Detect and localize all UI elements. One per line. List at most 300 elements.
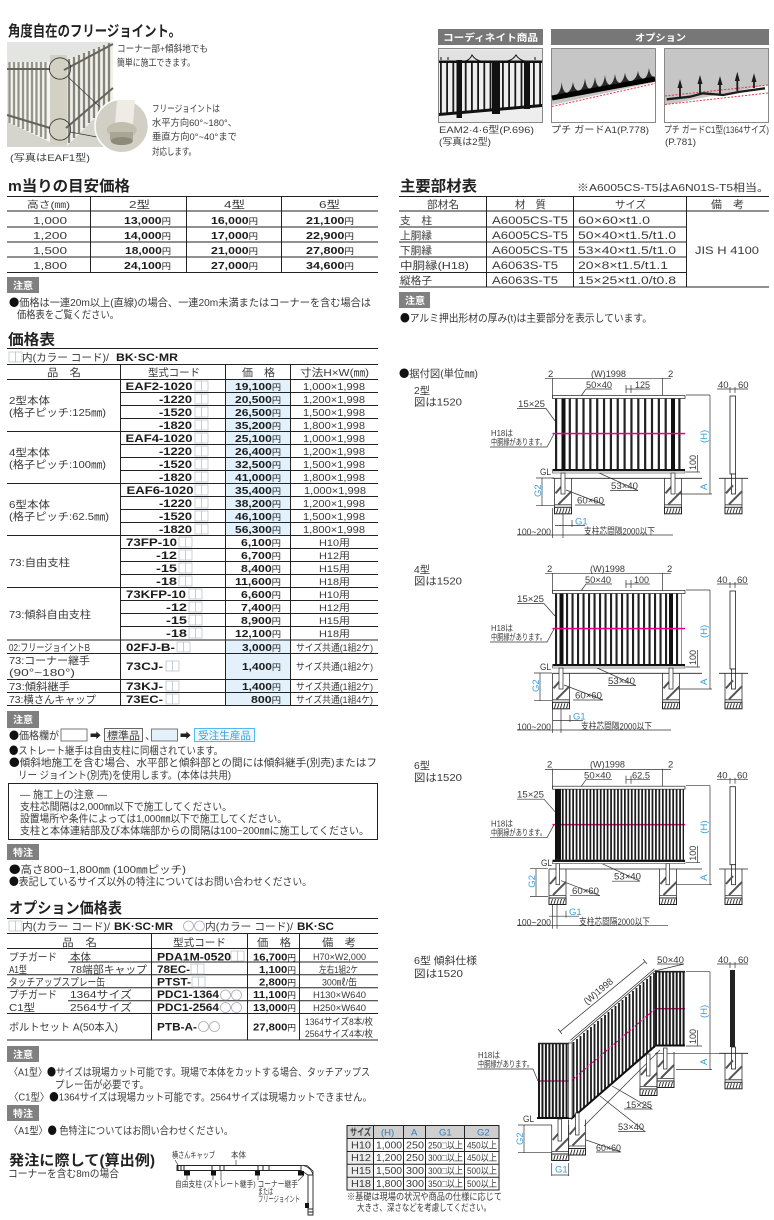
photo: petit guard A1 <box>552 48 656 122</box>
dimensions: サイズ共通(1組2ケ) <box>296 642 373 654</box>
sloped panel <box>574 973 654 1117</box>
legend: price cell colours: 標準品 <box>107 729 140 742</box>
section: option price table <box>7 899 378 1138</box>
table: materials: 支 柱 <box>400 214 433 227</box>
table: materials: 中胴縁(H18) <box>400 259 469 272</box>
photo: gate <box>438 48 542 122</box>
model codes: 73FP-10 <box>126 537 177 549</box>
table: options: 300㎖/缶 <box>322 976 357 988</box>
table: foundation sizes: ※基礎は現場の状況や商品の仕様に応じて <box>347 1191 502 1203</box>
header: coordinated products: コーディネイト商品 <box>443 32 538 44</box>
diagram: type 6: (W)1998 <box>590 760 625 771</box>
table: options: C1型 <box>9 1001 35 1014</box>
table: foundation sizes: 450以上 <box>467 1140 497 1152</box>
notes: special order <box>9 862 312 889</box>
diagram: type 6 sloped <box>414 954 749 1176</box>
table: foundation sizes: 350□以上 <box>428 1179 463 1190</box>
section: ordering example <box>8 1150 313 1215</box>
table: foundation sizes: 1,000 <box>376 1140 402 1152</box>
table: options: 27,800 円 <box>253 1022 296 1034</box>
diagram: type 2: 2 <box>548 369 553 380</box>
diagram: type 6 sloped: A <box>699 1058 710 1065</box>
table: materials: JIS H 4100 <box>695 245 759 257</box>
diagram: layout plan: 自由支柱 (ストレート継手) コーナー継手 <box>175 1179 298 1189</box>
diagram: type 4: 2 <box>667 564 672 575</box>
product names: 73:傾斜自由支柱 <box>9 608 92 621</box>
side view: 60 <box>738 380 749 391</box>
prices: 35,200 円 <box>235 420 281 432</box>
dimensions: サイズ共通(1組4ケ) <box>296 694 373 706</box>
model codes: -15 <box>166 615 187 627</box>
text: joint angles: 水平方向60°~180°、 <box>152 117 237 129</box>
diagram: type 6: 15×25 <box>517 790 544 801</box>
table: foundation sizes: A <box>411 1128 418 1138</box>
table: price per metre: 34,600 円 <box>306 260 354 272</box>
diagram: type 6: 2 <box>547 760 552 771</box>
model codes: -1520 <box>159 511 192 523</box>
table: price per metre: 1,800 <box>33 260 67 272</box>
note: colour special order: 〈A1型〉● 色特注についてはお問い合わせください。 <box>9 1123 233 1138</box>
model codes: -1520 <box>159 407 192 419</box>
dimensions: 1,800×1,998 <box>303 524 365 536</box>
table: price per metre: 1,000 <box>33 215 67 227</box>
side view <box>717 575 748 709</box>
table: options: 11,100 円 <box>253 989 296 1001</box>
table: materials: 15×25×t1.0/t0.8 <box>578 275 676 287</box>
table: price per metre: 16,000 円 <box>211 215 258 227</box>
label: special order <box>7 844 39 860</box>
note: price conditions: ●価格は一連20m以上(直線)の場合、一連20m未満またはコーナーを含む場合は <box>9 295 371 310</box>
dimensions: H18用 <box>319 577 350 588</box>
side view <box>717 955 749 1089</box>
model codes: -1520 <box>159 459 192 471</box>
table header: 型式コード <box>148 366 200 379</box>
table: options: 2564サイズ <box>70 1001 132 1014</box>
heading: price per metre: m当りの目安価格 <box>8 177 130 195</box>
table: price per metre: 2型 <box>129 198 150 211</box>
header: options <box>551 29 769 45</box>
diagram: type 6 sloped: H18は <box>478 1050 500 1060</box>
diagram: type 6 sloped: 60×60 <box>596 1143 621 1154</box>
product names: 73:傾斜継手 <box>9 680 70 693</box>
diagram: type 2: (H) <box>699 430 710 443</box>
diagram: type 2: G1 <box>575 516 588 528</box>
table: materials: A6063S-T5 <box>492 275 558 287</box>
diagram: type 6 sloped: 50×40 <box>657 955 684 966</box>
prices: 25,100 円 <box>235 433 281 445</box>
notes: cutting: 〈A1型〉●サイズは現場カット可能です。現場で本体をカットする場合、タッチアップス <box>9 1064 370 1080</box>
heading: price table: 価格表 <box>8 330 55 348</box>
dimensions: H12用 <box>319 603 350 614</box>
table: foundation sizes: (H) <box>381 1128 394 1138</box>
table: options: 価 格 <box>257 936 292 949</box>
table: foundation sizes: G2 <box>477 1128 490 1138</box>
dimensions: 1,800×1,998 <box>303 472 365 484</box>
table: materials: 縦格子 <box>400 274 433 287</box>
diagram: type 6 sloped: 図は1520 <box>414 968 463 980</box>
diagram: type 4: H18は <box>491 623 513 633</box>
table: foundation sizes: 250 <box>406 1152 424 1164</box>
diagram: type 2: 125 <box>635 380 650 391</box>
diagram: type 6 sloped: G1 <box>555 1164 568 1176</box>
captions: プチ ガードA1(P.778) <box>551 125 649 136</box>
table: foundation sizes: 1,500 <box>376 1165 402 1177</box>
diagram: type 4: 53×40 <box>608 676 635 687</box>
model codes: EAF4-1020 <box>126 433 192 445</box>
model codes: EAF6-1020 <box>126 485 194 497</box>
diagram: type 4: 50×40 <box>585 575 611 586</box>
heading: option prices: オプション価格表 <box>9 899 122 917</box>
side view: 60 <box>737 575 748 586</box>
diagram: type 4: A <box>699 678 710 685</box>
text: joint angles <box>152 104 237 158</box>
section: price table notes <box>7 711 378 889</box>
panel: coordinated products and options <box>438 29 769 148</box>
table: materials: 20×8×t1.5/t1.1 <box>578 260 668 272</box>
table: price per metre: 27,800 円 <box>306 245 354 257</box>
table: main prices <box>7 348 378 706</box>
notes: joints: ●傾斜地施工を含む場合、水平部と傾斜部との間には傾斜継手(別売)またはフ <box>9 755 377 770</box>
colour code note <box>9 920 334 933</box>
captions <box>439 124 769 148</box>
model codes <box>126 381 194 706</box>
diagram: type 2: H18は <box>491 428 513 438</box>
notes: special order: ●高さ800~1,800㎜ (100㎜ピッチ) <box>9 862 186 877</box>
diagram: type 6 sloped: 中胴縁があります。 <box>478 1059 533 1069</box>
diagram: type 4: 15×25 <box>517 594 544 605</box>
notes: cutting: プレー缶が必要です。 <box>55 1078 149 1091</box>
diagram: type 6: A <box>699 874 710 881</box>
diagram: type 6: G1 <box>569 907 582 918</box>
table: options <box>7 918 378 1040</box>
table: price per metre: 17,000 円 <box>211 230 258 242</box>
text: joint angles: フリージョイントは <box>152 104 220 115</box>
table: foundation sizes: 250□以上 <box>428 1140 463 1152</box>
dimensions: H18用 <box>319 629 350 640</box>
table: foundation sizes: 500以上 <box>467 1166 497 1177</box>
prices: 46,100 円 <box>235 511 281 523</box>
dimensions <box>296 381 373 706</box>
table: materials: 部材名 <box>427 198 459 211</box>
prices: 3,000 円 <box>242 642 281 654</box>
diagram: type 4: G1 <box>573 712 586 722</box>
notes: joints: ●ストレート継手は自由支柱に同梱されています。 <box>9 743 223 758</box>
table: materials: 50×40×t1.5/t1.0 <box>578 230 676 242</box>
prices: 6,100 円 <box>241 537 281 549</box>
table: options: H250×W640 <box>313 1003 366 1014</box>
table: price per metre: 6型 <box>319 198 340 211</box>
dimensions: 1,200×1,998 <box>303 394 365 406</box>
legend: price cell colours: 受注生産品 <box>198 729 251 742</box>
product names <box>9 394 109 706</box>
legend: price cell colours: 、 <box>145 730 156 742</box>
label: special order: 特注 <box>13 1108 34 1120</box>
prices: 56,300 円 <box>235 524 281 536</box>
table: foundation sizes: H12 <box>351 1152 371 1164</box>
diagram: type 6: 2 <box>668 760 673 771</box>
table: foundation sizes: 300□以上 <box>428 1166 463 1177</box>
table: price per metre: 14,000 円 <box>124 230 171 242</box>
note: extrusion thickness: ●アルミ押出形材の厚み(t)は主要部分を表示しています。 <box>400 310 652 326</box>
table: foundation sizes: H10 <box>351 1140 371 1152</box>
label: special order: 特注 <box>13 847 34 859</box>
model codes: 73KJ- <box>126 681 163 693</box>
heading: installation drawings: ●据付図(単位㎜) <box>399 366 478 381</box>
notes: cutting <box>9 1064 372 1104</box>
table: colour code note: BK·SC·MR <box>116 352 178 364</box>
model codes: -12 <box>156 550 177 562</box>
table: materials: サイズ <box>615 198 646 211</box>
prices: 35,400 円 <box>235 485 281 497</box>
model codes: -15 <box>156 563 177 575</box>
diagram: type 6: 53×40 <box>614 872 641 883</box>
diagram: type 4: 4型 <box>414 563 430 576</box>
side view: 40 <box>718 955 729 966</box>
prices: 19,100 円 <box>235 381 281 393</box>
table header: 品 名 <box>47 366 81 379</box>
callout: installation cautions <box>8 784 378 840</box>
table: price per metre: 1,200 <box>33 230 67 242</box>
table: options: 16,700 円 <box>253 952 296 964</box>
section: price per metre <box>7 177 378 321</box>
table: foundation sizes: 大きさ、深さなどを考慮してください。 <box>357 1202 491 1214</box>
notes: joints: リー ジョイント(別売)を使用します。(本体は共用) <box>18 768 231 782</box>
diagram: type 2: 支柱芯間隔2000以下 <box>584 526 655 538</box>
diagram: type 4: (H) <box>699 625 710 638</box>
diagram: type 4: 100~200 <box>517 722 551 733</box>
diagram: type 6 sloped: G2 <box>515 1132 526 1145</box>
prices: 6,700 円 <box>241 550 281 562</box>
model codes: -1220 <box>159 446 192 458</box>
table: options: プチガード <box>9 989 57 1001</box>
diagram: type 2: 53×40 <box>611 481 638 492</box>
notes: cutting: 〈C1型〉●1364サイズは現場カット可能です。2564サイズは現場カットできません。 <box>9 1090 372 1104</box>
product names: 2型本体 <box>9 394 51 407</box>
product names: (格子ピッチ:100㎜) <box>9 458 106 471</box>
dimensions: 1,500×1,998 <box>303 511 365 523</box>
prices: 8,900 円 <box>241 615 281 627</box>
product names: 73:自由支柱 <box>9 556 71 569</box>
heading: materials: 主要部材表 <box>400 177 477 195</box>
side view <box>717 771 748 904</box>
model codes: 02FJ-B- <box>126 642 175 654</box>
table: price per metre: 24,100 円 <box>124 260 171 272</box>
model codes: 73CJ- <box>126 661 163 673</box>
diagram: type 4: 100 <box>634 575 649 586</box>
diagram: type 6 <box>414 759 748 929</box>
diagram: type 2: A <box>699 483 710 490</box>
label: caution <box>7 277 39 293</box>
legend: price cell colours: ➡ <box>180 730 192 742</box>
table: price per metre: 4型 <box>224 198 245 211</box>
diagram: type 6 sloped: 53×40 <box>618 1122 644 1133</box>
table: options: 備 考 <box>322 937 356 949</box>
dimensions: 1,200×1,998 <box>303 498 365 510</box>
callout: installation cautions: 設置場所や条件によっては1,000㎜以下で施工してください。 <box>20 812 287 825</box>
prices: 11,600 円 <box>235 576 281 588</box>
table: options: H130×W640 <box>313 990 366 1001</box>
table: price per metre: 27,000 円 <box>211 260 258 272</box>
model codes: -18 <box>166 628 187 640</box>
diagram: type 2: 15×25 <box>518 399 545 410</box>
table: foundation sizes: G1 <box>439 1128 452 1138</box>
diagram: type 2: 100 <box>688 455 699 470</box>
legend: price cell colours: ●価格欄が <box>9 728 59 743</box>
side view: 40 <box>717 771 728 782</box>
model codes: -1220 <box>159 498 192 510</box>
diagram: type 2: 2型 <box>414 384 430 397</box>
dimensions: 1,000×1,998 <box>303 381 365 393</box>
table: price per metre: 13,000 円 <box>124 215 171 227</box>
model codes: EAF2-1020 <box>126 381 192 393</box>
subheading: 8m example: コーナーを含む8mの場合 <box>8 1167 119 1180</box>
diagram: type 6: GL <box>541 858 552 869</box>
colour code note: BK·SC <box>297 921 334 933</box>
label: special order <box>7 1105 39 1121</box>
table: foundation sizes: 450以上 <box>467 1153 497 1164</box>
table: options: PTST- <box>157 976 191 988</box>
table: options: 品 名 <box>62 936 97 949</box>
diagram: type 6 sloped: (W)1998 <box>582 976 616 1007</box>
captions: (P.781) <box>665 137 696 148</box>
dimensions: 1,800×1,998 <box>303 420 365 432</box>
colour code swatches <box>166 381 208 704</box>
model codes: 73EC- <box>126 694 163 706</box>
product names: 6型本体 <box>9 498 51 511</box>
table: options: 2,800 円 <box>259 976 296 988</box>
table: options: プチガード <box>9 952 57 964</box>
text: corner note <box>117 43 208 69</box>
side view: 60 <box>737 771 748 782</box>
diagram: type 4 <box>414 563 748 733</box>
table: materials: A6063S-T5 <box>492 260 558 272</box>
table: foundation sizes: 250 <box>406 1140 424 1152</box>
product names: 4型本体 <box>9 446 51 459</box>
legend: price cell colours: ➡ <box>90 730 102 742</box>
note: alloy equivalence: ※A6005CS-T5はA6N01S-T5相当。 <box>577 181 769 194</box>
photo: fence corner <box>7 42 148 153</box>
diagram: type 4: 2 <box>547 564 552 575</box>
diagram: type 6: H18は <box>491 819 513 829</box>
label: caution <box>399 292 430 308</box>
diagram: type 2: 60×60 <box>577 496 604 506</box>
side view: 40 <box>717 575 728 586</box>
section: main materials <box>399 177 769 326</box>
dimensions: H10用 <box>319 590 350 601</box>
table: options: PTB-A- <box>157 1022 197 1034</box>
table: price per metre: 21,100 円 <box>306 215 354 227</box>
prices: 1,400 円 <box>242 661 281 673</box>
diagram: type 2: (W)1998 <box>591 369 626 380</box>
dimensions: 1,500×1,998 <box>303 459 365 471</box>
table: foundation sizes: 300 <box>406 1165 424 1177</box>
table: options: H70×W2,000 <box>313 952 366 963</box>
heading: free joint: 角度自在のフリージョイント。 <box>8 22 181 40</box>
dimensions: H10用 <box>319 538 350 549</box>
label: caution: 注意 <box>13 280 34 292</box>
table: foundation sizes: H18 <box>351 1178 371 1190</box>
table: options: PDA1M-0520 <box>157 952 231 964</box>
prices: 7,400 円 <box>241 602 281 614</box>
photo: petit guard C1 <box>664 48 768 122</box>
caption: photo: (写真はEAF1型) <box>10 152 90 164</box>
diagram: type 2: G2 <box>533 484 544 497</box>
prices: 12,100 円 <box>235 628 281 640</box>
prices: 1,400 円 <box>242 681 281 693</box>
diagram: type 2: GL <box>540 467 551 478</box>
section: price table <box>7 330 378 706</box>
product names: (格子ピッチ:125㎜) <box>9 406 106 419</box>
callout: installation cautions: 支柱芯間隔は2,000㎜以下で施工してください。 <box>20 800 232 813</box>
model codes: -12 <box>166 602 187 614</box>
table: options: 型式コード <box>173 936 226 949</box>
dimensions: H15用 <box>319 616 350 627</box>
callout: installation cautions: — 施工上の注意 — <box>20 788 107 801</box>
table: options: 左右1組2ケ <box>319 964 358 976</box>
table: options: 1,100 円 <box>259 964 296 976</box>
table: colour code note: 内(カラー コード)/ <box>22 351 109 364</box>
prices: 26,400 円 <box>235 446 281 458</box>
dimensions: H12用 <box>319 551 350 562</box>
diagram: type 4: 支柱芯間隔2000以下 <box>581 720 652 732</box>
label: caution: 注意 <box>13 1049 34 1061</box>
note: price conditions <box>9 295 371 321</box>
dimensions: 1,200×1,998 <box>303 446 365 458</box>
legend: price cell colours <box>9 728 254 743</box>
table header: 寸法H×W(㎜) <box>300 366 369 379</box>
diagram: type 6: 図は1520 <box>414 772 462 784</box>
table: materials: 53×40×t1.5/t1.0 <box>578 245 676 257</box>
table: foundation sizes: 1,200 <box>376 1152 402 1164</box>
diagram: type 2: 2 <box>668 369 673 380</box>
table: materials: 上胴縁 <box>400 229 433 242</box>
prices <box>235 381 281 706</box>
table: foundation sizes: サイズ <box>350 1126 371 1138</box>
table: materials: 備 考 <box>711 199 744 211</box>
prices: 20,500 円 <box>235 394 281 406</box>
diagram: layout plan: または <box>258 1186 273 1196</box>
table: materials: A6005CS-T5 <box>492 245 568 257</box>
diagram: type 4: GL <box>540 662 551 673</box>
diagram: layout plan: 横さんキャップ <box>172 1150 215 1160</box>
dimensions: 1,000×1,998 <box>304 485 366 497</box>
table: price per metre: 高さ(㎜) <box>27 199 70 211</box>
table: options: 本体 <box>70 950 91 964</box>
table: foundation sizes <box>347 1126 502 1214</box>
product names: 02:フリージョイントB <box>9 642 90 654</box>
table: price per metre: 22,900 円 <box>306 230 354 242</box>
diagram: type 6 sloped: 6型 傾斜仕様 <box>414 954 478 967</box>
colour code note: 内(カラー コード)/ <box>22 920 110 933</box>
header: coordinated products <box>438 29 543 45</box>
dimensions: 1,000×1,998 <box>303 433 365 445</box>
side view: 40 <box>718 380 729 391</box>
header: options: オプション <box>635 33 686 44</box>
diagram: type 4: 中胴縁があります。 <box>491 632 546 642</box>
table: price per metre: 1,500 <box>33 245 67 257</box>
table: options: 1364サイズ <box>70 988 132 1001</box>
text: corner note: コーナー部+傾斜地でも <box>117 43 208 55</box>
callout: installation cautions: 支柱と本体連結部及び本体端部からの間隔は100~200㎜に施工してください。 <box>20 824 369 837</box>
model codes: -1220 <box>159 394 192 406</box>
table: foundation sizes: 1,800 <box>376 1178 402 1190</box>
label: caution: 注意 <box>405 295 426 307</box>
side view <box>717 380 749 514</box>
table header <box>47 366 369 379</box>
table: foundation sizes: 500以上 <box>467 1179 497 1190</box>
diagram: layout plan <box>172 1150 313 1215</box>
product names: (90°~180°) <box>9 667 75 679</box>
